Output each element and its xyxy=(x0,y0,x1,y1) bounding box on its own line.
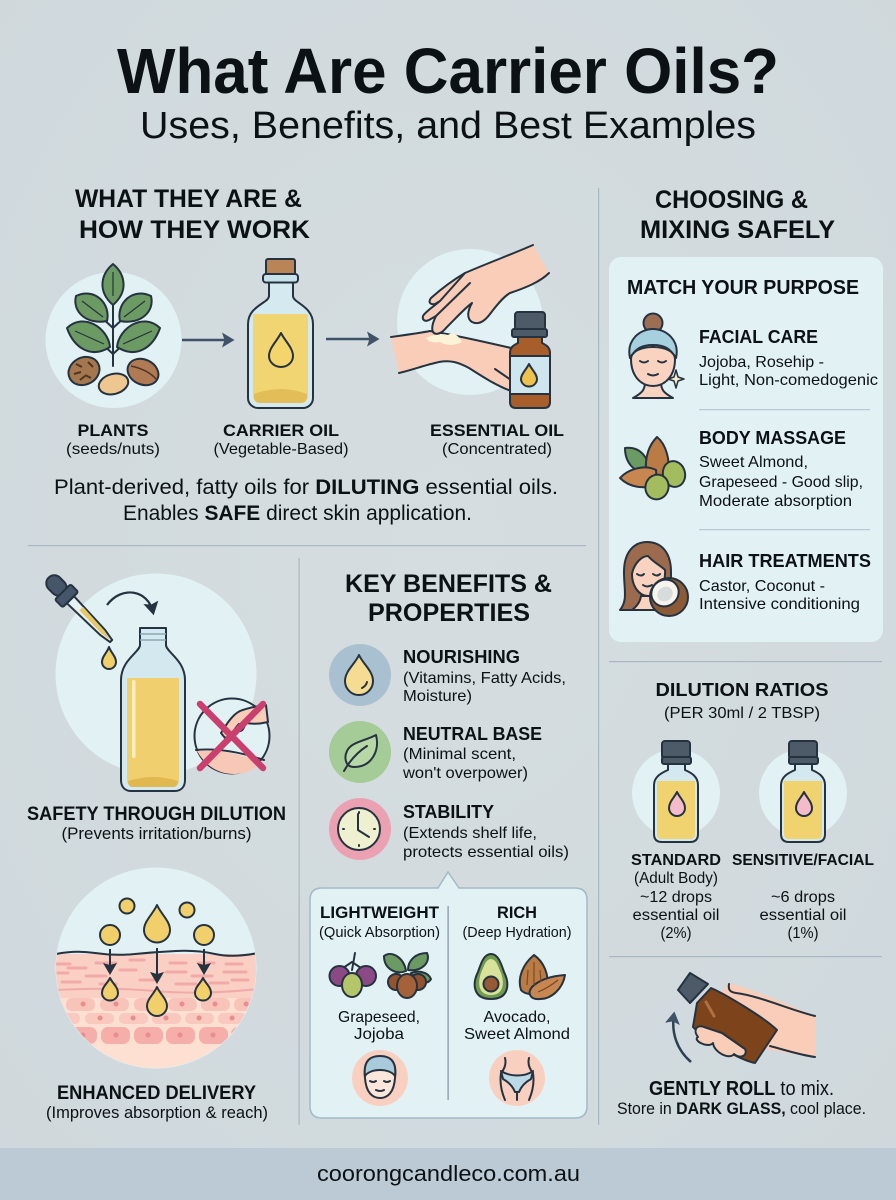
heading: key benefits and properties: KEY BENEFITS & xyxy=(345,570,552,598)
droplets inside skin xyxy=(102,978,211,1016)
benefit: neutral base xyxy=(329,721,542,783)
benefit: neutral base: (Minimal scent, xyxy=(403,746,516,763)
arrow: curved into bottle xyxy=(107,592,153,612)
title: What Are Carrier Oils? xyxy=(117,35,779,107)
label: enhanced delivery: (Improves absorption & reach) xyxy=(46,1104,268,1122)
panel: lightweight versus rich oils xyxy=(310,872,587,1118)
heading: what they are and how they work: WHAT THEY ARE & xyxy=(75,185,302,213)
label: plants: (seeds/nuts) xyxy=(66,441,160,458)
icon: almonds xyxy=(520,955,565,999)
footer xyxy=(0,1148,896,1200)
icon: falling oil drop xyxy=(102,647,116,669)
icon: dropper xyxy=(41,570,119,649)
text block: gently roll and store xyxy=(617,1078,866,1118)
ratio: sensitive or facial xyxy=(732,741,874,942)
heading: what they are and how they work: HOW THEY WORK xyxy=(79,216,310,244)
arrow: carrier oil to essential oil xyxy=(326,338,377,340)
label: essential oil xyxy=(430,421,564,458)
arrows into skin xyxy=(110,948,204,981)
label: enhanced delivery: ENHANCED DELIVERY xyxy=(57,1083,256,1104)
item: hair treatments: Intensive conditioning xyxy=(699,596,860,613)
column: lightweight xyxy=(319,904,440,1106)
label: plants: PLANTS xyxy=(78,421,148,440)
icon: woman with coconut xyxy=(620,542,688,616)
column: lightweight: Grapeseed, xyxy=(338,1009,420,1026)
item: body massage: BODY MASSAGE xyxy=(699,428,846,448)
column: rich: RICH xyxy=(497,904,537,922)
label: enhanced delivery xyxy=(46,1083,268,1122)
skin layers xyxy=(50,951,262,1072)
ratio: standard: essential oil xyxy=(632,907,720,924)
panel: safety through dilution illustration xyxy=(41,570,269,791)
column: lightweight: LIGHTWEIGHT xyxy=(320,904,439,922)
icon: hand rolling dark bottle xyxy=(678,973,815,1063)
column: lightweight: (Quick Absorption) xyxy=(319,924,440,941)
benefit: stability xyxy=(329,798,569,861)
ratio: sensitive or facial: (1%) xyxy=(788,925,818,942)
item: facial care: Jojoba, Rosehip - xyxy=(699,354,824,371)
panel: match your purpose xyxy=(609,257,883,642)
column: rich xyxy=(462,904,572,1106)
icon: almonds and grapes xyxy=(620,437,688,503)
icon: carrier oil bottle xyxy=(248,259,313,408)
oil droplets above skin xyxy=(100,898,214,945)
text block: gently roll and store: GENTLY ROLL to mix. xyxy=(649,1078,834,1100)
heading: choosing and mixing safely: CHOOSING & xyxy=(655,186,808,214)
label: carrier oil xyxy=(214,421,348,458)
benefit: neutral base: won't overpower) xyxy=(402,765,528,782)
heading: choosing and mixing safely: MIXING SAFELY xyxy=(640,216,835,244)
item: hair treatments: Castor, Coconut - xyxy=(699,578,825,595)
title xyxy=(117,35,779,147)
item: hair treatments: HAIR TREATMENTS xyxy=(699,551,871,571)
benefit: nourishing: NOURISHING xyxy=(403,647,520,667)
text block: definition: Plant-derived, fatty oils for DILUTING essential oils. xyxy=(54,476,558,499)
ratio: standard: ~12 drops xyxy=(640,889,712,906)
ratio: standard: (Adult Body) xyxy=(634,870,718,887)
text block: definition xyxy=(54,476,558,525)
ratio: sensitive or facial: SENSITIVE/FACIAL xyxy=(732,852,874,869)
ratio: sensitive or facial: ~6 drops xyxy=(771,889,835,906)
heading: key benefits and properties xyxy=(345,570,552,627)
column: rich: Avocado, xyxy=(484,1009,550,1026)
footer: coorongcandleco.com.au xyxy=(317,1161,580,1186)
label: safety through dilution: (Prevents irritation/burns) xyxy=(62,825,252,843)
icon: body xyxy=(489,1050,545,1106)
label: essential oil: (Concentrated) xyxy=(442,441,552,458)
column: rich: (Deep Hydration) xyxy=(462,924,572,941)
label: plants xyxy=(66,421,160,458)
item: body massage xyxy=(620,428,863,510)
arrow: roll direction xyxy=(673,1014,691,1062)
benefit: nourishing: (Vitamins, Fatty Acids, xyxy=(403,670,566,687)
icon: face with towel xyxy=(629,314,684,398)
icon: large dilution bottle xyxy=(121,628,185,791)
heading: key benefits and properties: PROPERTIES xyxy=(368,599,530,627)
icon: standard bottle xyxy=(632,741,720,842)
benefit: stability: protects essential oils) xyxy=(403,844,569,861)
text block: definition: Enables SAFE direct skin application. xyxy=(123,502,472,525)
icon: oil drop xyxy=(329,644,391,706)
benefit: stability: (Extends shelf life, xyxy=(403,825,537,842)
icon: grapeseed xyxy=(330,953,376,997)
panel: enhanced delivery illustration xyxy=(50,868,262,1072)
panel: match your purpose: MATCH YOUR PURPOSE xyxy=(627,277,859,299)
label: safety through dilution: SAFETY THROUGH DILUTION xyxy=(27,804,286,825)
icon: no undiluted application xyxy=(194,698,270,774)
label: carrier oil: CARRIER OIL xyxy=(223,421,339,440)
item: body massage: Sweet Almond, xyxy=(699,454,808,471)
icon: avocado xyxy=(475,954,507,999)
icon: clock xyxy=(329,798,391,860)
icon: applying oil on skin with essential oil bottle xyxy=(391,245,550,408)
heading: what they are and how they work xyxy=(75,185,310,244)
item: body massage: Grapeseed - Good slip, xyxy=(699,474,863,491)
label: essential oil: ESSENTIAL OIL xyxy=(430,421,564,440)
benefit: nourishing xyxy=(329,644,566,706)
ratio: standard xyxy=(631,741,721,942)
icon: plants with seeds and nuts xyxy=(46,264,182,408)
label: safety through dilution xyxy=(27,804,286,843)
icon: jojoba xyxy=(384,953,431,998)
benefit: neutral base: NEUTRAL BASE xyxy=(403,724,542,744)
column: lightweight: Jojoba xyxy=(354,1026,404,1043)
heading: dilution ratios xyxy=(656,679,828,722)
item: facial care xyxy=(629,314,878,398)
column: rich: Sweet Almond xyxy=(464,1026,570,1043)
icon: leaf xyxy=(329,721,391,783)
heading: dilution ratios: (PER 30ml / 2 TBSP) xyxy=(664,705,820,722)
item: facial care: Light, Non-comedogenic xyxy=(699,372,878,389)
ratio: standard: (2%) xyxy=(660,925,692,942)
arrow: plants to carrier oil xyxy=(182,339,232,341)
heading: dilution ratios: DILUTION RATIOS xyxy=(656,679,828,700)
item: hair treatments xyxy=(620,542,871,616)
text block: gently roll and store: Store in DARK GLASS, cool place. xyxy=(617,1100,866,1118)
item: body massage: Moderate absorption xyxy=(699,493,852,510)
title: Uses, Benefits, and Best Examples xyxy=(140,105,756,147)
item: facial care: FACIAL CARE xyxy=(699,327,818,347)
heading: choosing and mixing safely xyxy=(640,186,835,244)
icon: face xyxy=(352,1050,408,1106)
benefit: nourishing: Moisture) xyxy=(403,688,472,705)
ratio: sensitive or facial: essential oil xyxy=(760,907,846,924)
icon: sensitive bottle xyxy=(759,741,847,842)
label: carrier oil: (Vegetable-Based) xyxy=(214,441,348,458)
ratio: standard: STANDARD xyxy=(631,852,721,869)
benefit: stability: STABILITY xyxy=(403,802,494,822)
